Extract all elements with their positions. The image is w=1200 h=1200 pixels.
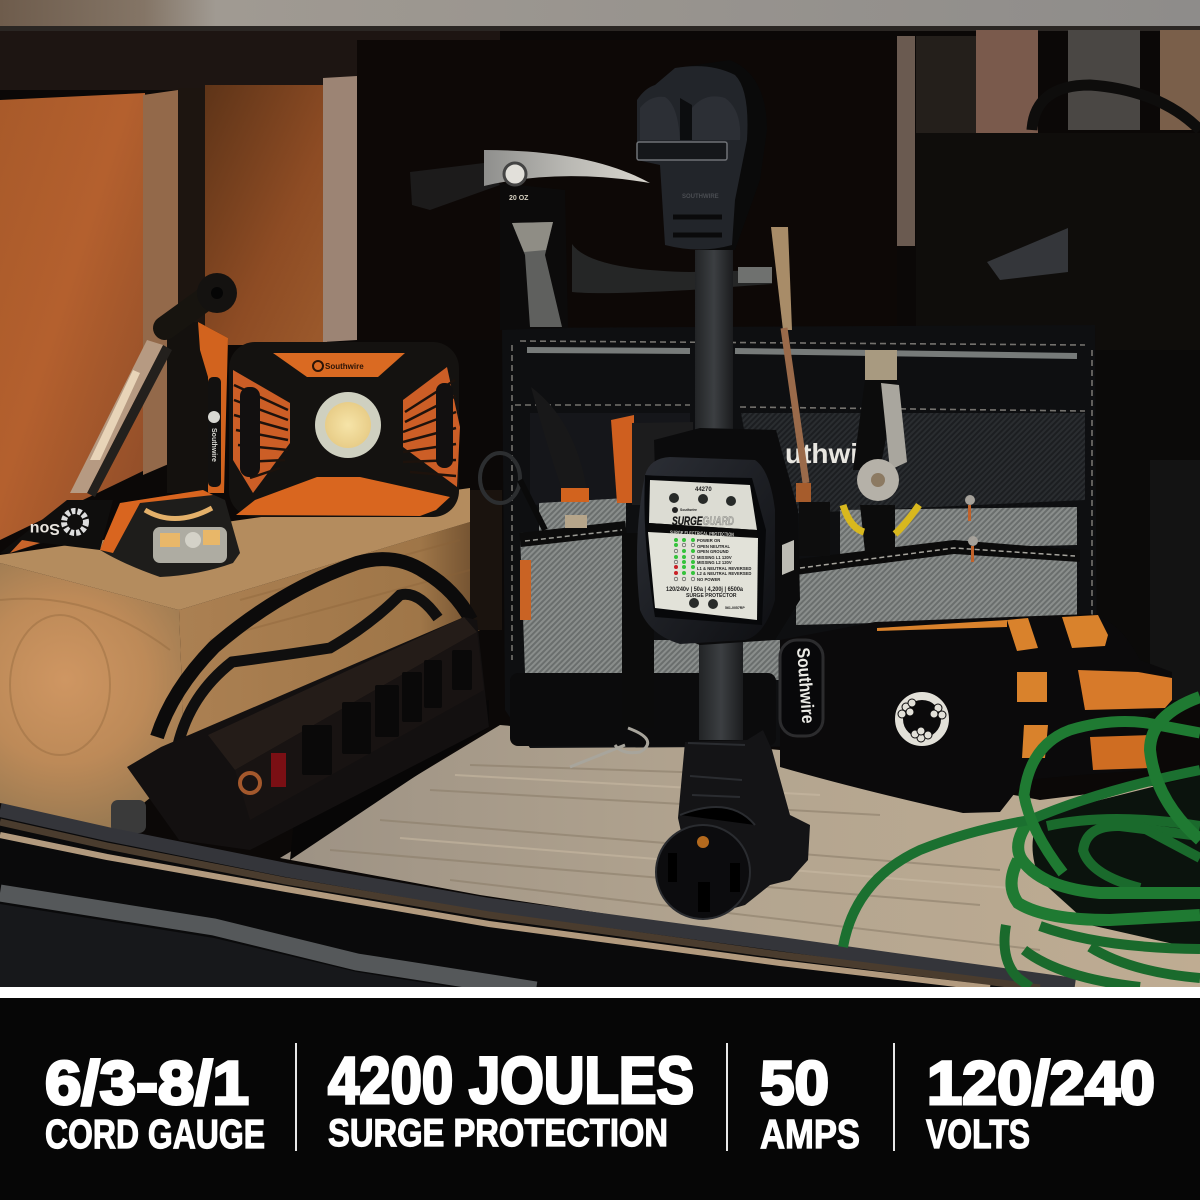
- spec: cord gauge: 6/3-8/1: [45, 1049, 249, 1117]
- product: SurgeGuard adapter: [637, 60, 810, 919]
- label lower with LED chart: POWER ON: [697, 538, 720, 543]
- tool: flood light: [229, 342, 460, 517]
- strap clip: [570, 728, 648, 767]
- spec: surge protection: [328, 1043, 694, 1155]
- white divider band: [0, 987, 1200, 998]
- orange tool: [611, 415, 634, 503]
- glove wrist strap: [780, 640, 823, 736]
- bag top binding: [527, 350, 1077, 356]
- tool bag: [480, 325, 1097, 767]
- bag pocket: left: [520, 527, 626, 676]
- stick light brand: Southwire: [210, 428, 217, 462]
- surge protector housing: [637, 428, 800, 645]
- lower plug: [656, 730, 810, 919]
- label lower with LED chart: L2 & NEUTRAL REVERSED: [697, 571, 751, 576]
- bag pocket: upper right: [840, 507, 1077, 570]
- bag pocket: lower right: [796, 553, 1077, 625]
- label lower with LED chart: MISSING L1 120V: [697, 555, 732, 560]
- spec: volts: VOLTS: [926, 1111, 1030, 1157]
- label lower with LED chart: MISSING L2 120V: [697, 560, 732, 565]
- fine print: 561-0057RP: [725, 606, 745, 610]
- tool: hammer: [410, 150, 1068, 330]
- label upper: [649, 480, 757, 530]
- label lower with LED chart: L1 & NEUTRAL REVERSED: [697, 566, 751, 571]
- spec: amps: 50: [760, 1049, 829, 1117]
- label lower with LED chart: NO POWER: [697, 577, 720, 582]
- bag brand text: uthwi: [785, 438, 858, 469]
- scissors: [480, 453, 545, 530]
- spec: cord gauge: CORD GAUGE: [45, 1111, 265, 1157]
- bag pocket: center lower: [626, 640, 780, 680]
- upper plug marking: SOUTHWIRE: [682, 194, 719, 200]
- product name: SURGEGUARD: [672, 514, 734, 528]
- spec: amps: AMPS: [760, 1111, 860, 1157]
- spec: cord gauge: [45, 1049, 265, 1157]
- label lower with LED chart: [648, 532, 758, 620]
- upper plug: [637, 60, 767, 250]
- glove brand text: Southwire: [793, 647, 818, 724]
- spec: surge protection: SURGE PROTECTION: [328, 1112, 668, 1155]
- divider 3: [893, 1043, 895, 1151]
- tool: stick work light: [70, 273, 237, 497]
- reset buttons: [689, 598, 718, 609]
- black subtitle band: [648, 523, 758, 538]
- coil shadow: [1032, 775, 1200, 950]
- headlamp strap text: Sou: [30, 520, 60, 537]
- pocket snap rivets: [965, 495, 978, 562]
- wood block: [0, 488, 502, 830]
- receptacle rivet: [697, 836, 709, 848]
- spec: volts: [926, 1049, 1155, 1157]
- tool: screwdriver: [771, 227, 830, 556]
- cutters: [531, 387, 589, 528]
- tool: work glove: [780, 614, 1172, 813]
- bag strap: [622, 533, 654, 728]
- spec: amps: [760, 1049, 860, 1157]
- spec bar: [0, 998, 1200, 1200]
- hammer marking: 20 OZ: [509, 195, 529, 202]
- upper tube: [695, 250, 733, 440]
- glove logo: [898, 696, 946, 742]
- floor: wood plank bed: [280, 725, 1200, 990]
- divider 2: [726, 1043, 728, 1151]
- tool: green extension cord: [843, 697, 1200, 987]
- ratings text: 120/240v | 50a | 4,200j | 6500a: [666, 587, 744, 593]
- flood light brand: Southwire: [325, 362, 364, 371]
- label lower with LED chart: OPEN GROUND: [697, 549, 729, 554]
- lower tube: [699, 640, 743, 740]
- divider 1: [295, 1043, 297, 1151]
- bag pocket: upper left: [539, 498, 626, 532]
- truck bed edge: [0, 810, 1085, 990]
- label lower with LED chart: OPEN NEUTRAL: [697, 544, 730, 549]
- tool: power strip: [111, 559, 489, 860]
- side sticker: [782, 540, 794, 575]
- black subtitle band: SURGE ELECTRICAL PROTECTION: [670, 530, 734, 538]
- strip switch: [271, 753, 286, 787]
- strip logo: [240, 773, 260, 793]
- spec: volts: 120/240: [927, 1049, 1155, 1117]
- bag mesh pocket: [741, 413, 1085, 515]
- brand: Southwire: [680, 508, 697, 512]
- headlamp strap logo: [64, 511, 86, 533]
- indicator buttons: [669, 493, 736, 506]
- bag base: [510, 673, 776, 746]
- model number: 44270: [695, 487, 712, 493]
- spec: surge protection: 4200 JOULES: [328, 1043, 694, 1117]
- label lower with LED chart: SURGE PROTECTOR: [686, 593, 737, 599]
- pliers: [843, 350, 919, 552]
- tool: headlamp: [0, 490, 240, 577]
